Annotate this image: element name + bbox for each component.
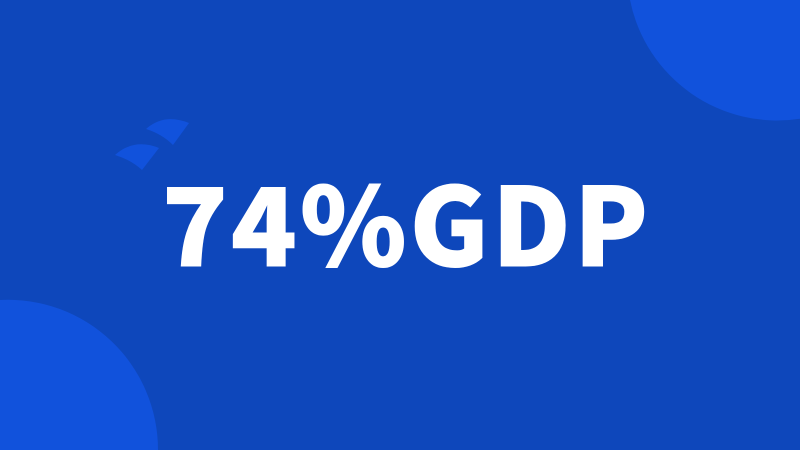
decorative circle: top right bbox=[630, 0, 800, 120]
icon: logo fan shapes bbox=[115, 119, 189, 170]
decorative circle: bottom left bbox=[0, 300, 158, 450]
title: 74%GDP bbox=[162, 142, 651, 298]
